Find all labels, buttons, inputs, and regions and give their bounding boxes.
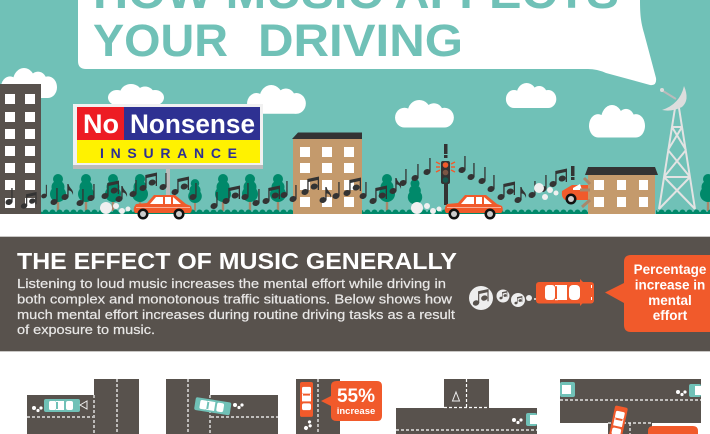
diagram 4: T junction <box>396 379 537 434</box>
diagram 5: crossing road with callout <box>560 379 701 434</box>
legend callout: mental <box>648 293 692 308</box>
trees and hedge <box>41 174 710 214</box>
diagram 1: turning left at junction <box>27 379 139 434</box>
car middle with exhaust puffs <box>411 195 503 220</box>
speech bubble with title: DRIVING <box>258 15 463 66</box>
legend callout <box>605 255 710 332</box>
legend callout: effort <box>653 308 688 323</box>
billboard: Nonsense <box>130 109 255 139</box>
music icons trailing car <box>469 286 536 310</box>
dark intro band <box>0 236 710 352</box>
crashed car <box>534 178 590 207</box>
callout cropped at bottom <box>648 426 698 434</box>
music notes <box>5 156 575 210</box>
billboard: INSURANCE <box>100 145 237 161</box>
band body text <box>17 276 455 337</box>
traffic light <box>436 144 455 205</box>
left tower block <box>0 84 41 214</box>
car left with exhaust puffs <box>100 195 192 220</box>
band heading: THE EFFECT OF MUSIC GENERALLY <box>17 248 457 274</box>
callout: 55% increase: 55% <box>337 386 375 407</box>
legend car <box>536 279 594 306</box>
callout: 55% increase <box>321 381 382 421</box>
billboard <box>73 104 263 196</box>
sky background <box>0 0 710 214</box>
band body text: Listening to loud music increases the mental effort while driving in <box>17 276 446 291</box>
clouds <box>1 68 645 138</box>
speech bubble with title <box>78 0 656 85</box>
billboard: No <box>83 109 119 139</box>
callout: 55% increase: increase <box>337 406 375 417</box>
band body text: both complex and monotonous traffic situations. Below shows how <box>17 292 453 306</box>
right building <box>585 167 658 214</box>
radio tower with dish <box>659 86 695 209</box>
legend callout: increase in <box>635 278 705 292</box>
diagram 2: turning right at junction <box>166 379 278 434</box>
legend callout: Percentage <box>634 262 707 277</box>
band body text: of exposure to music. <box>17 322 155 337</box>
speech bubble with title: YOUR <box>93 15 228 66</box>
diagram 3: straight road with callout <box>296 379 382 434</box>
band body text: much mental effort increases during routine driving tasks as a result <box>17 307 455 322</box>
middle building <box>292 132 362 214</box>
